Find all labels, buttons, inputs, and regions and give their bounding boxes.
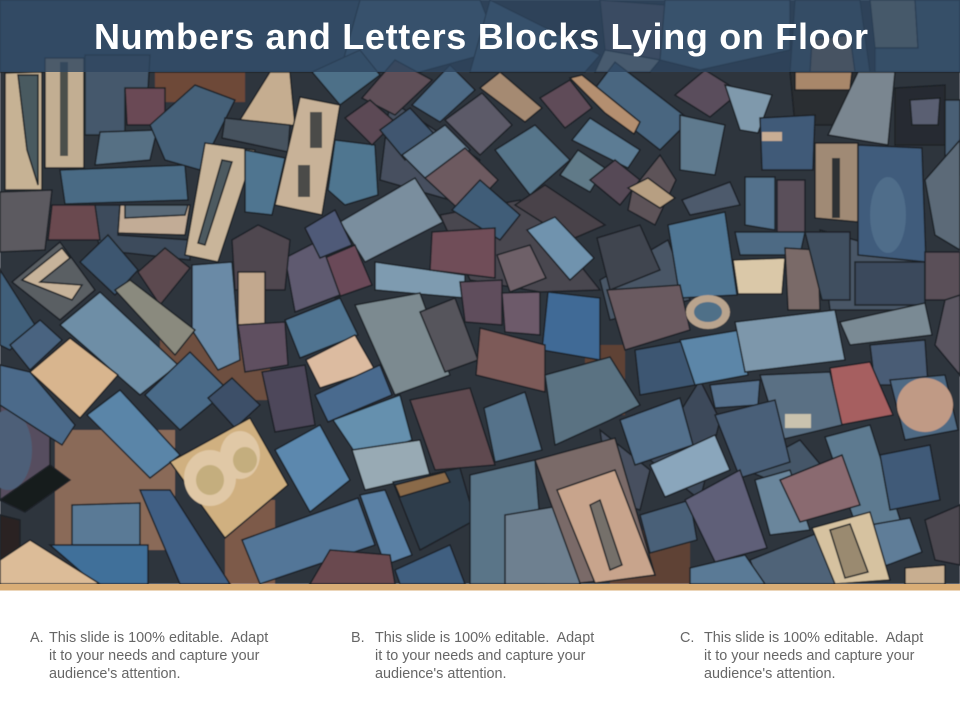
- text block A: [30, 630, 268, 682]
- text block C: audience's attention.: [704, 666, 836, 682]
- blocks under title band: [0, 0, 960, 72]
- text block B: audience's attention.: [375, 666, 507, 682]
- lower-right blocks: [470, 285, 960, 584]
- upper-right blocks: [597, 70, 960, 310]
- text block C: This slide is 100% editable. Adapt: [704, 630, 923, 646]
- floor patches: [55, 72, 690, 584]
- upper-middle blocks: [312, 50, 690, 240]
- top-left blocks: [0, 55, 378, 350]
- text block B: This slide is 100% editable. Adapt: [375, 630, 594, 646]
- tan divider stripe: [0, 584, 960, 590]
- text block B: [351, 630, 594, 682]
- text block B: it to your needs and capture your: [375, 648, 585, 664]
- text block C: [680, 630, 924, 682]
- text block A: This slide is 100% editable. Adapt: [49, 630, 268, 646]
- title band: [0, 0, 960, 72]
- lower-left blocks: [0, 280, 465, 584]
- filler blocks between main blocks: [90, 100, 925, 510]
- text block B: B.: [351, 630, 365, 646]
- text block A: A.: [30, 630, 44, 646]
- text block C: C.: [680, 630, 694, 646]
- title: Numbers and Letters Blocks Lying on Floor: [94, 16, 868, 57]
- central blocks: [192, 178, 640, 550]
- text block C: it to your needs and capture your: [704, 648, 914, 664]
- text block A: it to your needs and capture your: [49, 648, 259, 664]
- text block A: audience's attention.: [49, 666, 181, 682]
